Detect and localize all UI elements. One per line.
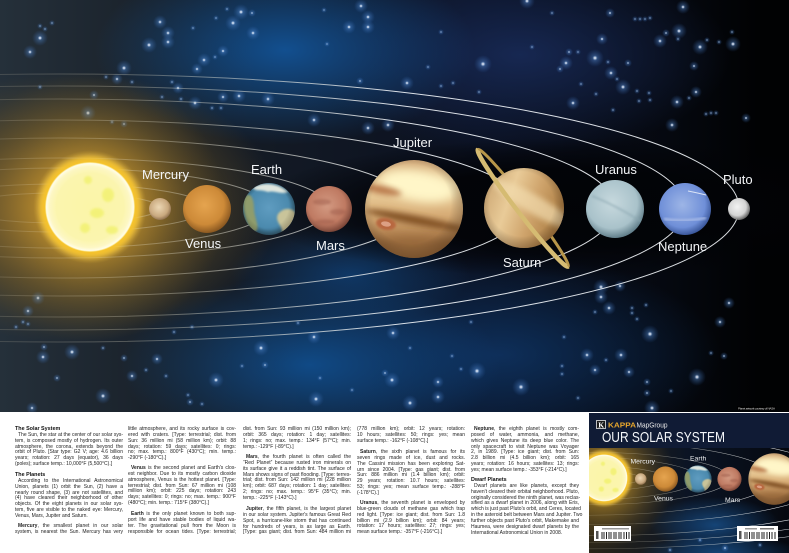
Saturn text: (-178°C).]	[357, 490, 379, 496]
orbit lines	[0, 74, 739, 342]
Saturn text: 53; rings: yes; mean surface temp.: -288°F	[357, 484, 465, 490]
the Sun	[40, 157, 140, 257]
The Planets text: Union, planets (1) orbit the Sun, (2) have a	[15, 484, 123, 490]
Mars text: km); orbit: 687 days; rotation: 1 day; satellites:	[243, 483, 351, 489]
The Solar System text	[15, 426, 123, 467]
Mercury text continued: Sun: 36 million mi (58 million km); orbit: 88	[128, 438, 236, 444]
Saturn text: seven rings made of ice, dust and rocks.	[357, 455, 465, 461]
The Solar System text: (poles); surface temp.: 10,000°F (5,500°C).]	[15, 461, 112, 467]
Saturn text	[357, 449, 465, 496]
Mercury text continued: -290°F (-180°C).]	[128, 455, 166, 461]
Saturn text: The Cassini mission has been exploring Sat-	[357, 461, 465, 467]
Jupiter text: for hundreds of years, is as large as Earth.	[243, 524, 351, 530]
Dwarf Planets text: Dwarf Planets	[471, 477, 507, 483]
cover solar system image	[589, 448, 789, 553]
Neptune	[659, 183, 711, 235]
cover planet labels: Mercury	[630, 458, 656, 466]
Mercury text continued: little atmosphere, and its rocky surface is cov-	[128, 426, 236, 432]
planetary system: orbits, Sun and planets	[0, 72, 750, 342]
publisher logo: KAPPA	[608, 420, 637, 430]
Mercury text: system, is nearest the Sun. Mercury has very	[15, 529, 123, 535]
The Planets text: nearly round shape, (3) are not satellites, and	[15, 490, 123, 496]
Saturn text: Sun: 886 million mi (1.4 billion km); orbit:	[357, 472, 465, 478]
planet labels: Neptune	[658, 239, 707, 254]
Uranus text: red light. [Type: ice giant; dist. from Sun: 1.8	[357, 512, 465, 518]
The Solar System text: orbit of Pluto. [Star type: G2 V; age: 4.6 billion	[15, 449, 123, 455]
planet labels: Pluto	[723, 172, 753, 187]
Saturn with rings	[476, 148, 570, 269]
Neptune text: only spacecraft to visit Neptune was Voyager	[471, 444, 579, 450]
Jupiter text continued: surface temp.: -162°F (-108°C).]	[357, 438, 428, 444]
Venus	[183, 185, 231, 233]
text column 4	[357, 426, 465, 535]
Uranus text: Uranus, the seventh planet is enveloped by	[360, 500, 465, 506]
Mars text: Mars shows signs of past flooding. [Type: terres-	[243, 472, 351, 478]
Mars text: temp.: -225°F (-143°C).]	[243, 495, 296, 501]
Mars text: “Red Planet” because rusted iron minerals on	[243, 460, 351, 466]
Mercury text continued: days; rotation: 59 days; satellites: 0; rings:	[128, 444, 236, 450]
cover planet labels: Venus	[654, 496, 673, 502]
Mercury text continued	[128, 426, 236, 461]
Dwarf Planets text	[471, 477, 582, 536]
cover planet labels: Mars	[725, 497, 741, 504]
Venus text: est neighbor. Due to its mostly carbon dioxide	[128, 471, 236, 477]
The Solar System text: The Sun, the star at the center of our solar sys-	[18, 432, 123, 438]
The Planets text: According to the International Astronomical	[18, 478, 123, 484]
Neptune text: 2, in 1989. [Type: ice giant; dist. from Sun:	[471, 449, 579, 455]
Venus text: million km); orbit: 225 days; rotation: 243	[128, 488, 236, 494]
planet labels: Venus	[185, 236, 222, 251]
Mercury text: Mercury, the smallest planet in our solar	[18, 523, 123, 529]
The Solar System text: The Solar System	[15, 426, 60, 432]
The Planets text: objects. Of the eight planets in our solar sys-	[15, 501, 123, 507]
publisher logo: MapGroup	[636, 420, 668, 430]
Uranus	[586, 180, 644, 238]
Earth	[243, 183, 296, 235]
Dwarf Planets text: in the asteroid belt between Mars and Jupiter. Two	[471, 512, 582, 518]
publisher logo: K	[598, 420, 604, 429]
cover title: OUR SOLAR SYSTEM	[602, 429, 725, 446]
Mars text: Mars, the fourth planet is often called the	[246, 454, 351, 460]
Jupiter text: Spot, a hurricane-like storm that has continued	[243, 518, 351, 524]
Uranus text: billion mi (2.9 billion km); orbit: 84 years;	[357, 518, 465, 524]
Mercury text	[15, 523, 123, 535]
Earth text: ter. The gravitational pull from the Moon is	[128, 523, 236, 529]
Earth text: port life and have stable bodies of liquid wa-	[128, 517, 236, 523]
The Planets text	[15, 472, 123, 519]
Mars text: trial; dist. from Sun: 142 million mi (228 million	[243, 477, 351, 483]
Uranus text: mean surface temp.: -357°F (-216°C).]	[357, 529, 442, 535]
Neptune text: posed of water, ammonia, and methane,	[471, 432, 579, 438]
Earth text continued: temp.: -129°F (-89°C).]	[243, 444, 294, 450]
Uranus text	[357, 500, 465, 535]
Venus text: Venus is the second planet and Earth's clos-	[131, 465, 236, 471]
Earth text continued: dist. from Sun: 93 million mi (150 million km);	[243, 426, 351, 432]
Neptune text: which gives Neptune its deep blue color. The	[471, 438, 579, 444]
Venus text: days; satellites: 0; rings: no; max. temp.: 900°F	[128, 494, 236, 500]
Jupiter text: Jupiter, the fifth planet, is the largest planet	[246, 506, 351, 512]
Neptune text: years; rotation: 16 hours; satellites: 13; rings:	[471, 461, 579, 467]
planet labels: Saturn	[503, 255, 541, 270]
planet labels: Mercury	[142, 167, 189, 182]
text column 2	[128, 426, 236, 535]
Dwarf Planets text: International Astronomical Union in 2008.	[471, 530, 562, 536]
Neptune text: yes; mean surface temp.: -353°F (-214°C).]	[471, 467, 567, 473]
The Solar System text: tem, is composed mostly of hydrogen. Its outer	[15, 438, 123, 444]
text column 1	[15, 426, 123, 535]
cover planet labels	[630, 456, 741, 504]
Uranus text: blue-green clouds of methane gas which trap	[357, 506, 465, 512]
Jupiter text continued: (778 million km); orbit: 12 years; rotation:	[357, 426, 465, 432]
planet labels: Uranus	[595, 162, 637, 177]
Dwarf Planets text: which is just past Pluto's orbit, and Ceres, located	[471, 506, 581, 512]
Saturn text: 29 years; rotation: 10.7 hours; satellites:	[357, 478, 465, 484]
planet labels	[142, 135, 753, 270]
Dwarf Planets text: originally considered the ninth planet, was reclas-	[471, 495, 580, 501]
Earth text continued: orbit: 365 days; rotation: 1 day; satellites:	[243, 432, 351, 438]
map cover panel	[589, 413, 789, 553]
barcode right	[737, 526, 778, 541]
The Planets text: (4) have cleared their neighborhood of other	[15, 495, 123, 501]
Earth text continued: 1; rings: no; max. temp.: 134°F (57°C); min.	[243, 438, 351, 444]
Earth text continued	[243, 426, 351, 450]
cover planet labels: Earth	[690, 456, 706, 462]
The Planets text: Venus, Mars, Jupiter and Saturn.	[15, 513, 88, 519]
Mercury text continued: ered with craters. [Type: terrestrial; dist. from	[128, 432, 236, 438]
Dwarf Planets text: further objects past Pluto's orbit, Makemake and	[471, 518, 579, 524]
Mars text: its surface give it a reddish tint. The surface of	[243, 466, 351, 472]
Earth text: responsible for ocean tides. [Type: terrestrial;	[128, 529, 236, 535]
Mars text: 2; rings: no; max. temp.: 95°F (35°C); min.	[243, 489, 351, 495]
planet labels: Jupiter	[393, 135, 433, 150]
Jupiter text continued	[357, 426, 465, 444]
Jupiter	[362, 160, 465, 258]
starry space background	[0, 0, 789, 412]
Venus text	[128, 465, 236, 506]
Saturn text: Saturn, the sixth planet is famous for its	[360, 449, 465, 455]
planet labels: Earth	[251, 162, 282, 177]
Saturn text: urn since 2004. [Type: gas giant; dist. from	[357, 467, 465, 473]
Venus text: atmosphere, Venus is the hottest planet. [Type:	[128, 477, 236, 483]
Dwarf Planets text: Dwarf planets are like planets, except they	[474, 483, 579, 489]
Neptune text	[471, 426, 579, 473]
Jupiter text continued: 10 hours; satellites: 50; rings: yes; mean	[357, 432, 465, 438]
Earth text	[128, 511, 236, 535]
Venus text: (480°C); min. temp.: 715°F (380°C).]	[128, 500, 209, 506]
Dwarf Planets text: haven't cleared their orbital neighborhood. Pluto,	[471, 489, 579, 495]
The Solar System text: atmosphere, the corona, extends beyond the	[15, 444, 123, 450]
planet labels: Mars	[316, 238, 345, 253]
solar system illustration	[0, 0, 775, 412]
Neptune text: 2.8 billion mi (4.5 billion km); orbit: 165	[471, 455, 579, 461]
Uranus text: rotation: 17 hours; satellites: 27; rings: yes;	[357, 523, 465, 529]
The Planets text: The Planets	[15, 472, 45, 478]
sun glow	[0, 72, 225, 342]
Jupiter text: in our solar system. Jupiter's famous Great Red	[243, 512, 351, 518]
star field	[13, 0, 751, 416]
Jupiter text: [Type: gas giant; dist. from Sun: 484 million mi	[243, 529, 351, 535]
Neptune text: Neptune, the eighth planet is mostly com-	[474, 426, 579, 432]
publisher logo	[596, 420, 668, 430]
Mars	[306, 186, 352, 232]
text column 3	[243, 426, 351, 535]
barcode left	[594, 526, 631, 541]
cover header band	[589, 413, 789, 448]
Earth text: Earth is the only planet known to both sup-	[131, 511, 236, 517]
Jupiter text	[243, 506, 351, 535]
Mars text	[243, 454, 351, 501]
Dwarf Planets text: sified as a dwarf planet in 2006, along with Eris,	[471, 500, 579, 506]
text column 5	[471, 426, 582, 536]
Pluto	[728, 198, 750, 220]
The Solar System text: years; rotation: 27 days (equator), 36 days	[15, 455, 123, 461]
Dwarf Planets text: Haumea, were designated dwarf planets by the	[471, 524, 579, 530]
Mercury	[149, 198, 171, 220]
Mercury text continued: no; max. temp.: 800°F (430°C); min. temp.:	[128, 449, 236, 455]
image credit: Planet artwork courtesy of NASA	[738, 406, 775, 410]
The Planets text: tem, five are visible to the naked eye: Mercury,	[15, 507, 123, 513]
Venus text: terrestrial; dist. from Sun: 67 million mi (108	[128, 483, 236, 489]
